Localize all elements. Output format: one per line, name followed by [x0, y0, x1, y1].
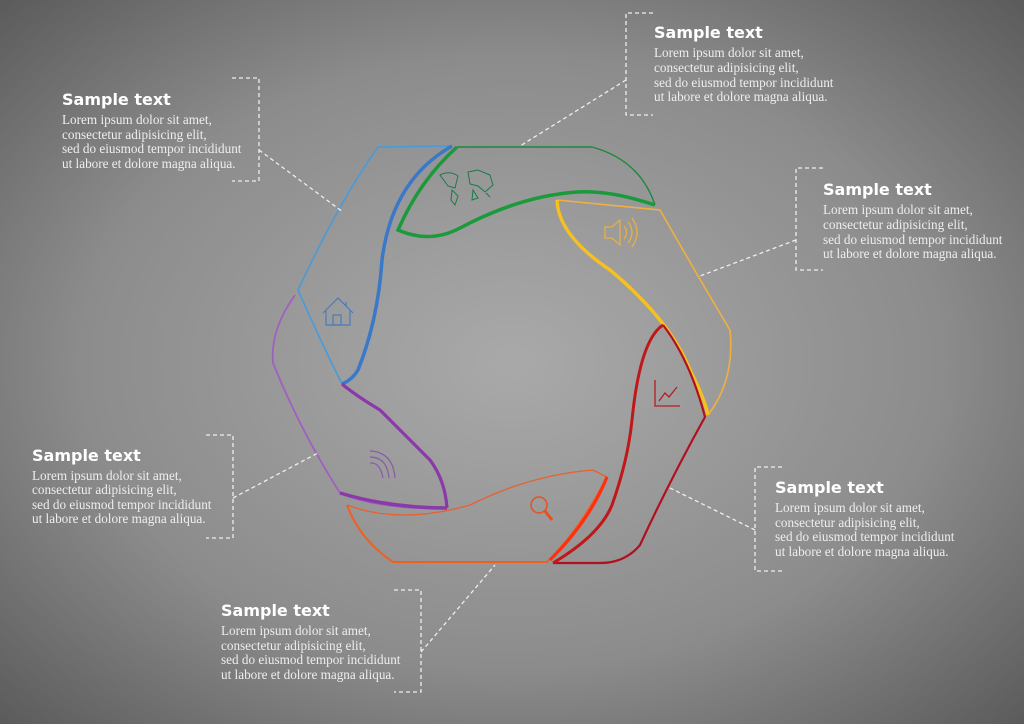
block: left-bottom: Lorem ipsum dolor sit amet, — [32, 468, 182, 483]
block: right: consectetur adipisicing elit, — [823, 217, 968, 232]
block: left-bottom: sed do eiusmod tempor incididunt — [32, 497, 212, 512]
block: bottom: Lorem ipsum dolor sit amet, — [221, 623, 371, 638]
block: bottom: ut labore et dolore magna aliqua. — [221, 667, 395, 682]
segment: blue — [298, 146, 452, 384]
block: top-left — [62, 78, 343, 212]
segment: red — [553, 325, 705, 563]
icon: world map — [440, 170, 493, 205]
block: top-left: Sample text — [62, 90, 171, 109]
block: top-right: consectetur adipisicing elit, — [654, 60, 799, 75]
block: bottom-right — [668, 467, 955, 571]
segment: green — [398, 147, 655, 237]
block: top-right: sed do eiusmod tempor incididunt — [654, 75, 834, 90]
block: left-bottom — [32, 435, 318, 538]
segment: purple — [273, 295, 447, 508]
block: top-left: Lorem ipsum dolor sit amet, — [62, 112, 212, 127]
block: bottom-right: Lorem ipsum dolor sit amet, — [775, 500, 925, 515]
block: left-bottom: consectetur adipisicing elit, — [32, 482, 177, 497]
block: bottom-right: consectetur adipisicing elit, — [775, 515, 920, 530]
icon: magnifier — [531, 497, 552, 520]
block: right — [700, 168, 1003, 276]
block: bottom-right: Sample text — [775, 478, 884, 497]
block: bottom — [221, 565, 495, 692]
block: bottom: sed do eiusmod tempor incididunt — [221, 652, 401, 667]
block: bottom: Sample text — [221, 601, 330, 620]
block: right: ut labore et dolore magna aliqua. — [823, 246, 997, 261]
block: right: sed do eiusmod tempor incididunt — [823, 232, 1003, 247]
block: left-bottom: Sample text — [32, 446, 141, 465]
block: top-right: Lorem ipsum dolor sit amet, — [654, 45, 804, 60]
block: right: Sample text — [823, 180, 932, 199]
icon: wifi — [370, 451, 395, 478]
block: top-right: Sample text — [654, 23, 763, 42]
icon: speaker — [605, 218, 637, 247]
block: top-left: ut labore et dolore magna aliqua. — [62, 156, 236, 171]
block: bottom-right: sed do eiusmod tempor incididunt — [775, 529, 955, 544]
block: top-left: consectetur adipisicing elit, — [62, 127, 207, 142]
block: left-bottom: ut labore et dolore magna aliqua. — [32, 511, 206, 526]
icon: chart — [655, 380, 680, 406]
block: bottom-right: ut labore et dolore magna aliqua. — [775, 544, 949, 559]
block: right: Lorem ipsum dolor sit amet, — [823, 202, 973, 217]
block: bottom: consectetur adipisicing elit, — [221, 638, 366, 653]
block: top-left: sed do eiusmod tempor incididunt — [62, 141, 242, 156]
block: top-right — [520, 13, 834, 146]
segment: orange — [347, 470, 607, 562]
icon: house — [323, 298, 353, 325]
block: top-right: ut labore et dolore magna aliqua. — [654, 89, 828, 104]
segment: yellow — [557, 200, 731, 415]
